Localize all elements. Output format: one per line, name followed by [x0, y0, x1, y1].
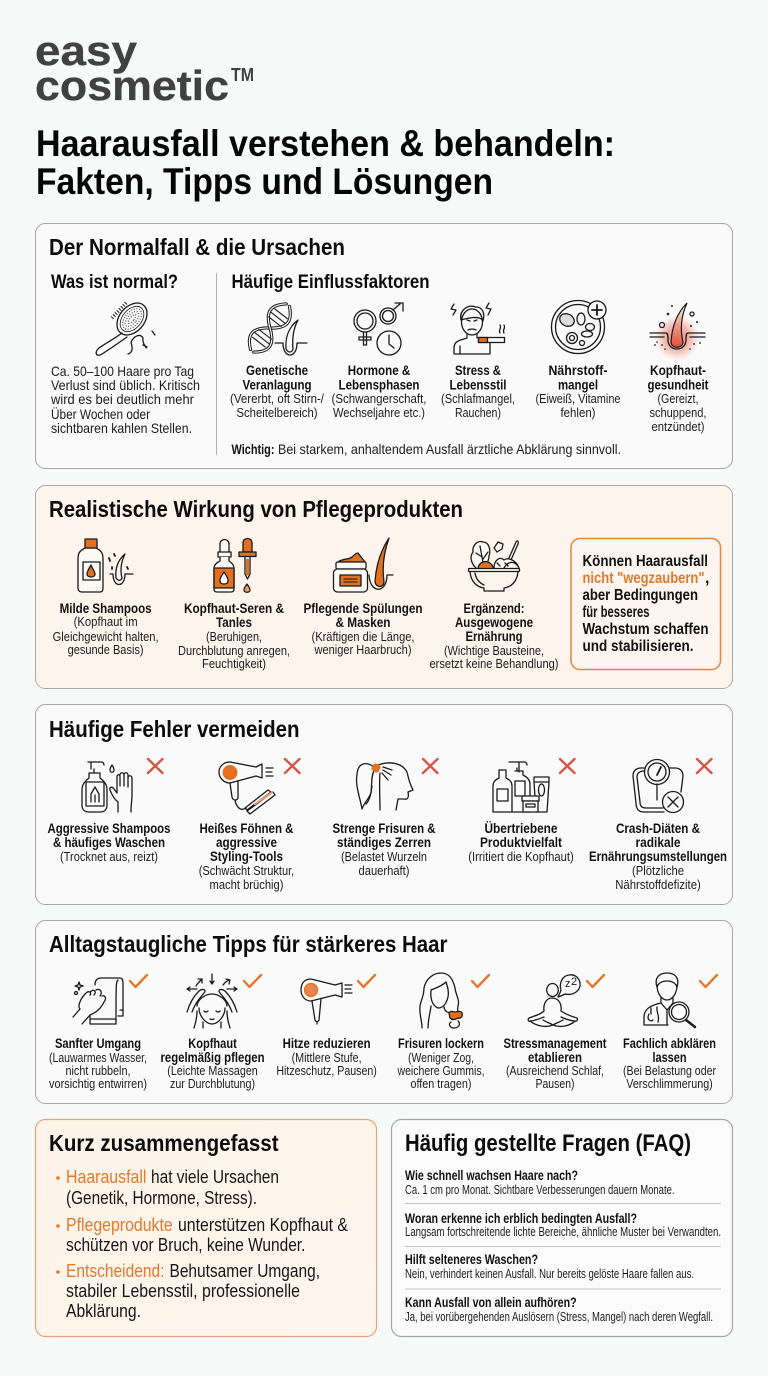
caption: [430, 601, 558, 671]
caption: Milde Shampoos: [60, 601, 152, 616]
icon: hair dryer and straightener: [219, 762, 275, 814]
caption: Frisuren lockern: [398, 1036, 484, 1051]
caption: (Mittlere Stufe,: [292, 1050, 362, 1065]
text: normal loss: Über Wochen oder: [51, 405, 150, 422]
heading: Häufige Einflussfaktoren: Häufige Einflussfaktoren: [232, 271, 430, 293]
caption: [332, 821, 436, 878]
caption: Genetische: [246, 363, 308, 378]
icon: meditation: 2: [571, 976, 577, 988]
callout: für besseres: [582, 604, 650, 621]
text: normal loss: Verlust sind üblich. Kritisch: [51, 377, 200, 393]
bullet: Haarausfall: hat viele Ursachen: [151, 1166, 279, 1187]
caption: [504, 1036, 607, 1091]
icon: red cross: [285, 759, 300, 773]
caption: Veranlagung: [242, 378, 312, 392]
caption: (Kopfhaut im: [74, 614, 138, 629]
caption: [230, 363, 324, 420]
caption: schuppend,: [650, 405, 706, 420]
heading: Kurz zusammengefasst: Kurz zusammengefasst: [49, 1130, 279, 1156]
bullet: Pflegeprodukte: unterstützen Kopfhaut &: [178, 1214, 349, 1235]
sub-panel: Was ist normal: [50, 271, 200, 436]
note: Wichtig: Bei starkem, anhaltendem Ausfall ärztliche Abklärung sinnvoll.: [278, 441, 621, 457]
caption: Verschlimmerung): [626, 1076, 713, 1091]
caption: (Irritiert die Kopfhaut): [468, 849, 574, 864]
callout: nicht "wegzaubern": [582, 570, 704, 587]
caption: [160, 1036, 264, 1091]
caption: & häufiges Waschen: [53, 835, 165, 850]
icon: serum and dropper: [214, 538, 256, 592]
callout: Können Haarausfall: [582, 553, 708, 570]
caption: [468, 821, 574, 864]
caption: (Eiweiß, Vitamine: [536, 391, 620, 406]
bullet: Entscheidend: Behutsamer Umgang,: [170, 1260, 320, 1281]
icon: pump bottle and hand: [82, 762, 132, 812]
bullet: Pflegeprodukte: [56, 1214, 349, 1255]
text: normal loss: Ca. 50–100 Haare pro Tag: [51, 363, 194, 379]
mistake: Strenge Frisuren: [332, 759, 438, 878]
logo: TM: [231, 65, 254, 85]
caption: Pflegende Spülungen: [304, 601, 422, 616]
caption: [178, 601, 290, 671]
icon: orange check: [130, 975, 147, 987]
caption: Hitze reduzieren: [283, 1036, 371, 1051]
icon: scalp massage: [187, 974, 237, 1028]
bullet: Haarausfall: [56, 1166, 279, 1208]
title: Fakten, Tipps und Lösungen: [36, 161, 493, 202]
caption: Fachlich abklären: [623, 1036, 716, 1051]
caption: vorsichtig entwirren): [49, 1076, 147, 1091]
caption: [536, 363, 620, 420]
caption: [397, 1036, 484, 1091]
mistake: Aggressive Shampoos: [48, 759, 170, 864]
caption: [332, 363, 426, 420]
caption: (Trocknet aus, reizt): [60, 849, 158, 864]
logo: cosmetic: [35, 62, 229, 109]
sub-panel: Was ist normal: Was ist normal?: [51, 271, 178, 293]
factor: Hormone: [332, 303, 426, 420]
caption: Styling-Tools: [210, 849, 283, 864]
caption: [441, 363, 515, 420]
factor: Genetische Veranlagung: [230, 298, 324, 420]
caption: aggressive: [216, 835, 277, 850]
caption: Gleichgewicht halten,: [53, 629, 159, 644]
caption: radikale: [636, 835, 681, 850]
caption: weichere Gummis,: [397, 1063, 484, 1078]
caption: (Vererbt, oft Stirn-/: [230, 391, 324, 406]
product: Milde Shampoos: [53, 539, 159, 657]
caption: [48, 821, 170, 864]
heading: Alltagstaugliche Tipps: Alltagstaugliche Tipps für stärkeres Haar: [49, 931, 448, 957]
icon: red cross: [148, 759, 162, 773]
faq item 2: Woran erkenne ich erblich bedingten Ausfall?: [405, 1211, 637, 1226]
caption: entzündet): [652, 419, 704, 434]
caption: [49, 1036, 147, 1091]
caption: (Beruhigen,: [206, 629, 262, 644]
caption: gesundheit: [648, 378, 709, 392]
factor: Nährstoffmangel: [536, 300, 620, 420]
caption: weniger Haarbruch): [314, 642, 412, 657]
caption: (Wichtige Bausteine,: [444, 643, 544, 658]
caption: Stress &: [455, 363, 501, 378]
caption: Kopfhaut-Seren &: [184, 601, 284, 616]
caption: [276, 1036, 377, 1078]
faq item 4: [405, 1295, 713, 1324]
caption: Aggressive Shampoos: [48, 821, 170, 836]
callout: ,: [705, 570, 709, 587]
bullet: Entscheidend: [56, 1260, 320, 1321]
icon: red cross: [423, 759, 438, 773]
mistake: Crash-Diäten: [589, 759, 727, 892]
product: Spülungen & Masken: [304, 538, 422, 657]
bullet: Pflegeprodukte: Pflegeprodukte: [66, 1214, 173, 1235]
mistake: Heißes Föhnen: [199, 759, 300, 892]
faq item 1: Wie schnell wachsen Haare nach?: [405, 1168, 578, 1183]
caption: dauerhaft): [358, 863, 410, 878]
tip: Kopfhaut pflegen: [160, 974, 264, 1091]
caption: lassen: [652, 1050, 686, 1065]
caption: Tanles: [216, 615, 252, 630]
caption: Strenge Frisuren &: [332, 821, 436, 836]
caption: zur Durchblutung): [170, 1076, 255, 1091]
bullet: Entscheidend: stabiler Lebensstil, professionelle: [66, 1280, 300, 1301]
caption: Rauchen): [455, 405, 501, 420]
tip: Sanfter Umgang: [49, 975, 147, 1091]
caption: [304, 601, 422, 657]
icon: red cross: [560, 759, 574, 773]
faq item 2: [405, 1211, 721, 1239]
caption: regelmäßig pflegen: [160, 1050, 264, 1065]
caption: (Bei Belastung oder: [623, 1063, 717, 1078]
caption: nicht rubbeln,: [66, 1063, 130, 1078]
caption: Heißes Föhnen &: [200, 821, 294, 836]
caption: ersetzt keine Behandlung): [430, 656, 558, 671]
factor: Kopfhautgesundheit: [648, 303, 709, 434]
icon: many products: [493, 762, 549, 812]
mistake: Produktvielfalt: [468, 759, 574, 864]
caption: (Plötzliche: [632, 863, 684, 878]
caption: Feuchtigkeit): [202, 656, 266, 671]
caption: (Belastet Wurzeln: [341, 849, 427, 864]
caption: & Masken: [336, 615, 390, 630]
caption: gesunde Basis): [68, 642, 144, 657]
icon: food plate: [552, 300, 606, 354]
caption: Nährstoffdefizite): [615, 877, 701, 892]
caption: (Lauwarmes Wasser,: [49, 1050, 147, 1065]
panel: Kurz zusammengefasst: [36, 1120, 376, 1336]
faq item 1: [405, 1168, 674, 1197]
faq item 3: Hilft selteneres Waschen?: [405, 1252, 538, 1267]
faq item 1: Ca. 1 cm pro Monat. Sichtbare Verbesserungen dauern Monate.: [405, 1183, 674, 1197]
caption: etablieren: [528, 1050, 582, 1065]
caption: Ernährungsumstellungen: [589, 849, 727, 864]
callout: [571, 538, 720, 670]
caption: offen tragen): [410, 1076, 472, 1091]
tip: Frisuren lockern: [397, 973, 489, 1091]
icon: doctor with magnifier: [644, 973, 695, 1027]
caption: Wechseljahre etc.): [333, 405, 425, 420]
icon: orange check: [358, 975, 375, 987]
factor: Stress: [441, 303, 515, 420]
bullet: Haarausfall: (Genetik, Hormone, Stress).: [66, 1187, 257, 1208]
caption: Produktvielfalt: [480, 835, 562, 850]
caption: Pausen): [536, 1076, 574, 1091]
title: [36, 123, 615, 202]
bullet: Haarausfall: Haarausfall: [66, 1166, 146, 1187]
caption: [589, 821, 727, 892]
icon: inflamed scalp: [650, 303, 705, 361]
caption: (Schwangerschaft,: [332, 391, 426, 406]
title: Haarausfall verstehen & behandeln:: [36, 123, 615, 164]
caption: (Schlafmangel,: [441, 391, 515, 406]
icon: scale: [633, 760, 684, 812]
faq item 3: [405, 1252, 694, 1281]
caption: Sanfter Umgang: [55, 1036, 141, 1051]
bullet: Entscheidend: Entscheidend:: [66, 1260, 164, 1281]
icon: shampoo bottle: [78, 539, 133, 592]
note: Wichtig: Wichtig:: [232, 441, 274, 457]
product: Kopfhaut-Seren: [178, 538, 290, 671]
product: Ernährung: [430, 541, 558, 671]
caption: Crash-Diäten &: [616, 821, 700, 836]
tip: Fachlich abklären: [623, 973, 717, 1091]
panel: Alltagstaugliche Tipps: [36, 920, 732, 1104]
icon: salad bowl: [468, 541, 520, 591]
caption: mangel: [558, 378, 598, 392]
panel: Realistische Wirkung: [36, 486, 732, 688]
icon: orange check: [587, 975, 604, 987]
icon: tight ponytail: [357, 763, 413, 810]
panel: FAQ: [392, 1120, 732, 1336]
caption: Scheitelbereich): [236, 405, 318, 420]
caption: Übertriebene: [484, 821, 558, 836]
caption: Kopfhaut: [188, 1036, 237, 1051]
caption: Ausgewogene: [455, 615, 533, 630]
icon: red cross: [697, 759, 712, 773]
text: normal loss: wird es bei deutlich mehr: [50, 391, 194, 407]
panel: Häufige Fehler vermeiden: [36, 704, 732, 904]
icon: cream jar and hair: [334, 538, 393, 592]
callout: aber Bedingungen: [582, 587, 698, 604]
icon: meditation: [528, 975, 580, 1026]
icon: meditation: z: [565, 978, 570, 990]
caption: Hitzeschutz, Pausen): [276, 1063, 377, 1078]
icon: hair dryer: [301, 979, 352, 1024]
icon: gender symbols and clock: [354, 303, 403, 355]
text: normal loss: [50, 363, 200, 436]
caption: Hormone &: [348, 363, 410, 378]
caption: [53, 601, 159, 657]
text: normal loss: sichtbaren kahlen Stellen.: [51, 420, 192, 436]
caption: (Leichte Massagen: [167, 1063, 258, 1078]
faq item 4: Kann Ausfall von allein aufhören?: [405, 1295, 577, 1310]
caption: [199, 821, 294, 892]
caption: Lebensphasen: [338, 378, 420, 392]
icon: hand with towel: [73, 978, 123, 1024]
caption: macht brüchig): [210, 877, 284, 892]
icon: hairbrush: [96, 297, 155, 355]
caption: [623, 1036, 717, 1091]
icon: stressed smoker: [451, 303, 505, 354]
bullet: Pflegeprodukte: schützen vor Bruch, keine Wunder.: [66, 1234, 305, 1255]
icon: orange check: [244, 975, 261, 987]
icon: DNA and hair: [243, 298, 307, 358]
caption: Stressmanagement: [504, 1036, 607, 1051]
caption: [648, 363, 709, 434]
heading: Der Normalfall: Der Normalfall & die Ursachen: [49, 234, 345, 260]
caption: (Gereizt,: [658, 391, 698, 406]
bullet: Entscheidend: Abklärung.: [66, 1300, 141, 1321]
heading: Realistische Wirkung: Realistische Wirkung von Pflegeprodukten: [49, 496, 463, 522]
logo: easy: [35, 27, 138, 74]
heading: FAQ: Häufig gestellte Fragen (FAQ): [405, 1130, 691, 1157]
caption: Durchblutung anregen,: [178, 643, 290, 658]
caption: Ernährung: [466, 629, 522, 644]
caption: Lebensstil: [450, 378, 506, 392]
caption: (Schwächt Struktur,: [199, 863, 294, 878]
caption: fehlen): [560, 405, 596, 420]
caption: (Kräftigen die Länge,: [312, 629, 414, 644]
caption: Kopfhaut-: [650, 363, 706, 378]
icon: orange check: [700, 975, 717, 987]
caption: (Weniger Zog,: [408, 1050, 474, 1065]
callout: Wachstum schaffen: [582, 621, 708, 638]
icon: orange check: [472, 975, 489, 987]
callout: und stabilisieren.: [582, 638, 694, 655]
caption: ständiges Zerren: [337, 835, 431, 850]
tip: Stressmanagement: [504, 975, 607, 1091]
logo: [35, 27, 254, 109]
caption: (Ausreichend Schlaf,: [506, 1063, 604, 1078]
caption: Nährstoff-: [548, 363, 608, 378]
heading: Häufige Fehler: Häufige Fehler vermeiden: [49, 716, 300, 742]
caption: Ergänzend:: [464, 601, 524, 616]
tip: Hitze reduzieren: [276, 975, 377, 1078]
panel: Der Normalfall & die Ursachen: [36, 224, 732, 468]
icon: woman with loose hair: [420, 973, 462, 1028]
